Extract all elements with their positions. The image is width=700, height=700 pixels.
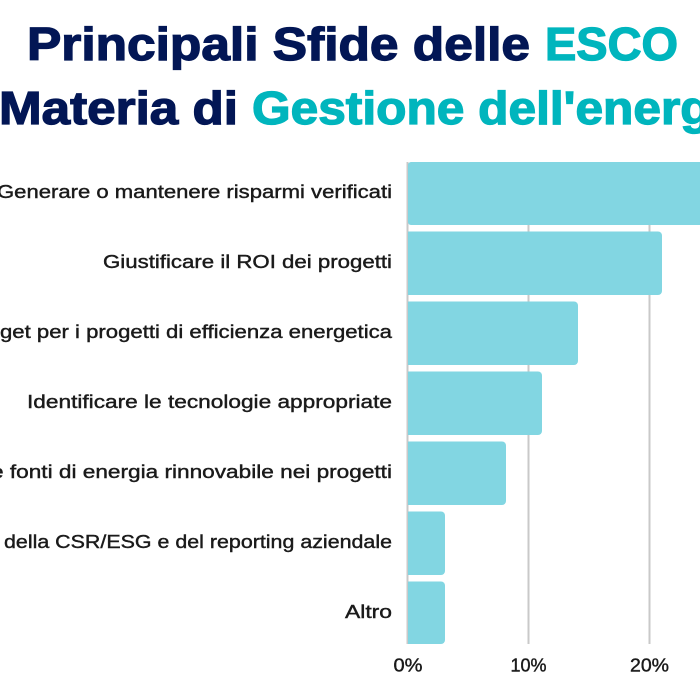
- label: fonti di energia rinnovabile nei progetti: e fonti di energia rinnovabile nei progetti: [0, 462, 392, 482]
- x axis labels: [394, 654, 669, 676]
- grid lines: [408, 162, 650, 644]
- label: Altro: Altro: [345, 602, 392, 622]
- label: della CSR/ESG e del reporting aziendale: della CSR/ESG e del reporting aziendale: [4, 532, 392, 552]
- label: budget per i progetti di efficienza energetica: get per i progetti di efficienza energetica: [0, 322, 393, 342]
- label: Giustificare il ROI dei progetti: Giustificare il ROI dei progetti: [103, 252, 392, 272]
- x axis labels: 20%: [630, 654, 669, 676]
- label: Generare o mantenere risparmi verificati: Generare o mantenere risparmi verificati: [0, 182, 392, 202]
- title: Materia di: [0, 82, 238, 134]
- bar: Identificare le tecnologie appropriate: [408, 372, 542, 435]
- bar: Generare o mantenere risparmi verificati: [408, 162, 700, 225]
- title: ESCO: [545, 18, 678, 70]
- label: Identificare le tecnologie appropriate: Identificare le tecnologie appropriate: [27, 392, 392, 412]
- bar chart: [408, 162, 700, 644]
- x axis labels: 0%: [394, 654, 422, 676]
- bar: della CSR/ESG e del reporting aziendale: [408, 512, 445, 575]
- bar: Altro: [408, 582, 445, 644]
- category labels: [0, 182, 393, 622]
- x axis labels: 10%: [510, 654, 546, 676]
- bar: fonti di energia rinnovabile nei progetti: [408, 442, 506, 505]
- title: Principali Sfide delle: [27, 18, 530, 70]
- bar: budget per i progetti di efficienza energetica: [408, 302, 578, 365]
- bar: Giustificare il ROI dei progetti: [408, 232, 662, 295]
- title: [0, 18, 700, 134]
